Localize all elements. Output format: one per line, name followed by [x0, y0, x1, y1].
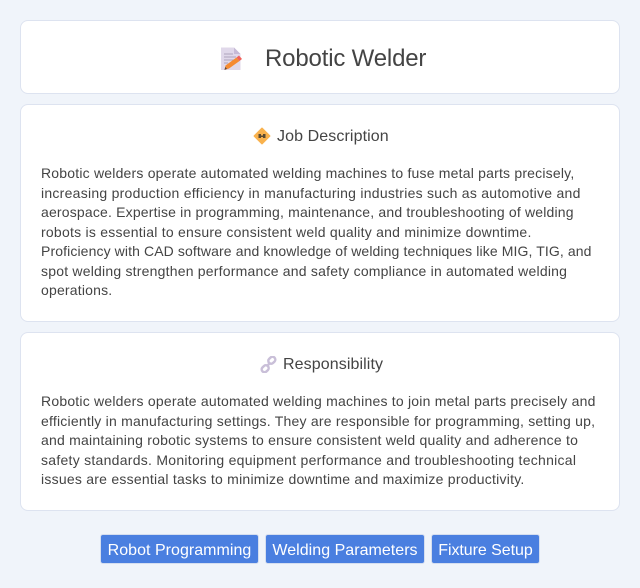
text block: responsibility: efficiently in manufacturing settings. They are responsible for programming, setting up, — [41, 413, 595, 429]
text block: job description: increasing production efficiency in manufacturing industries such as automotive and — [41, 185, 581, 201]
text block: responsibility: safety standards. Monitoring equipment performance and troubleshooting technical — [41, 452, 576, 468]
text block: job description: Robotic welders operate automated welding machines to fuse metal parts precisely, — [41, 165, 574, 181]
tag: welding parameters: Welding Parameters — [272, 542, 418, 559]
tag: welding parameters — [265, 534, 425, 564]
text block: responsibility: and maintaining robotic systems to ensure consistent weld quality and adherence to — [41, 432, 578, 448]
icon: diamond road sign — [254, 128, 270, 144]
tag: fixture setup: Fixture Setup — [438, 542, 533, 559]
panel: responsibility — [20, 332, 620, 511]
text block: responsibility — [41, 393, 596, 487]
title: Robotic Welder — [265, 45, 426, 72]
text block: job description: Proficiency with CAD software and knowledge of welding techniques like MIG, TIG, and — [41, 243, 592, 259]
icon: document with pencil — [221, 48, 242, 70]
text block: job description: aerospace. Expertise in programming, maintenance, and troubleshooting of welding — [41, 204, 574, 220]
tag: robot programming — [100, 534, 259, 564]
text block: responsibility: Robotic welders operate automated welding machines to join metal parts precisely and — [41, 393, 596, 409]
panel: job description — [20, 104, 620, 322]
panel: title card — [20, 20, 620, 94]
text block: job description — [41, 165, 592, 298]
tag: robot programming: Robot Programming — [108, 542, 251, 559]
tag: fixture setup — [431, 534, 540, 564]
text block: job description: robots is essential to ensure consistent weld quality and minimize downtime. — [41, 224, 532, 240]
heading: job description: Job Description — [277, 128, 389, 145]
text block: job description: spot welding strengthen performance and safety compliance in automated welding — [41, 263, 567, 279]
icon: chain link — [260, 356, 276, 373]
text block: job description: operations. — [41, 282, 112, 298]
heading: responsibility: Responsibility — [283, 356, 383, 373]
text block: responsibility: issues are essential tasks to minimize downtime and maximize productivity. — [41, 471, 525, 487]
